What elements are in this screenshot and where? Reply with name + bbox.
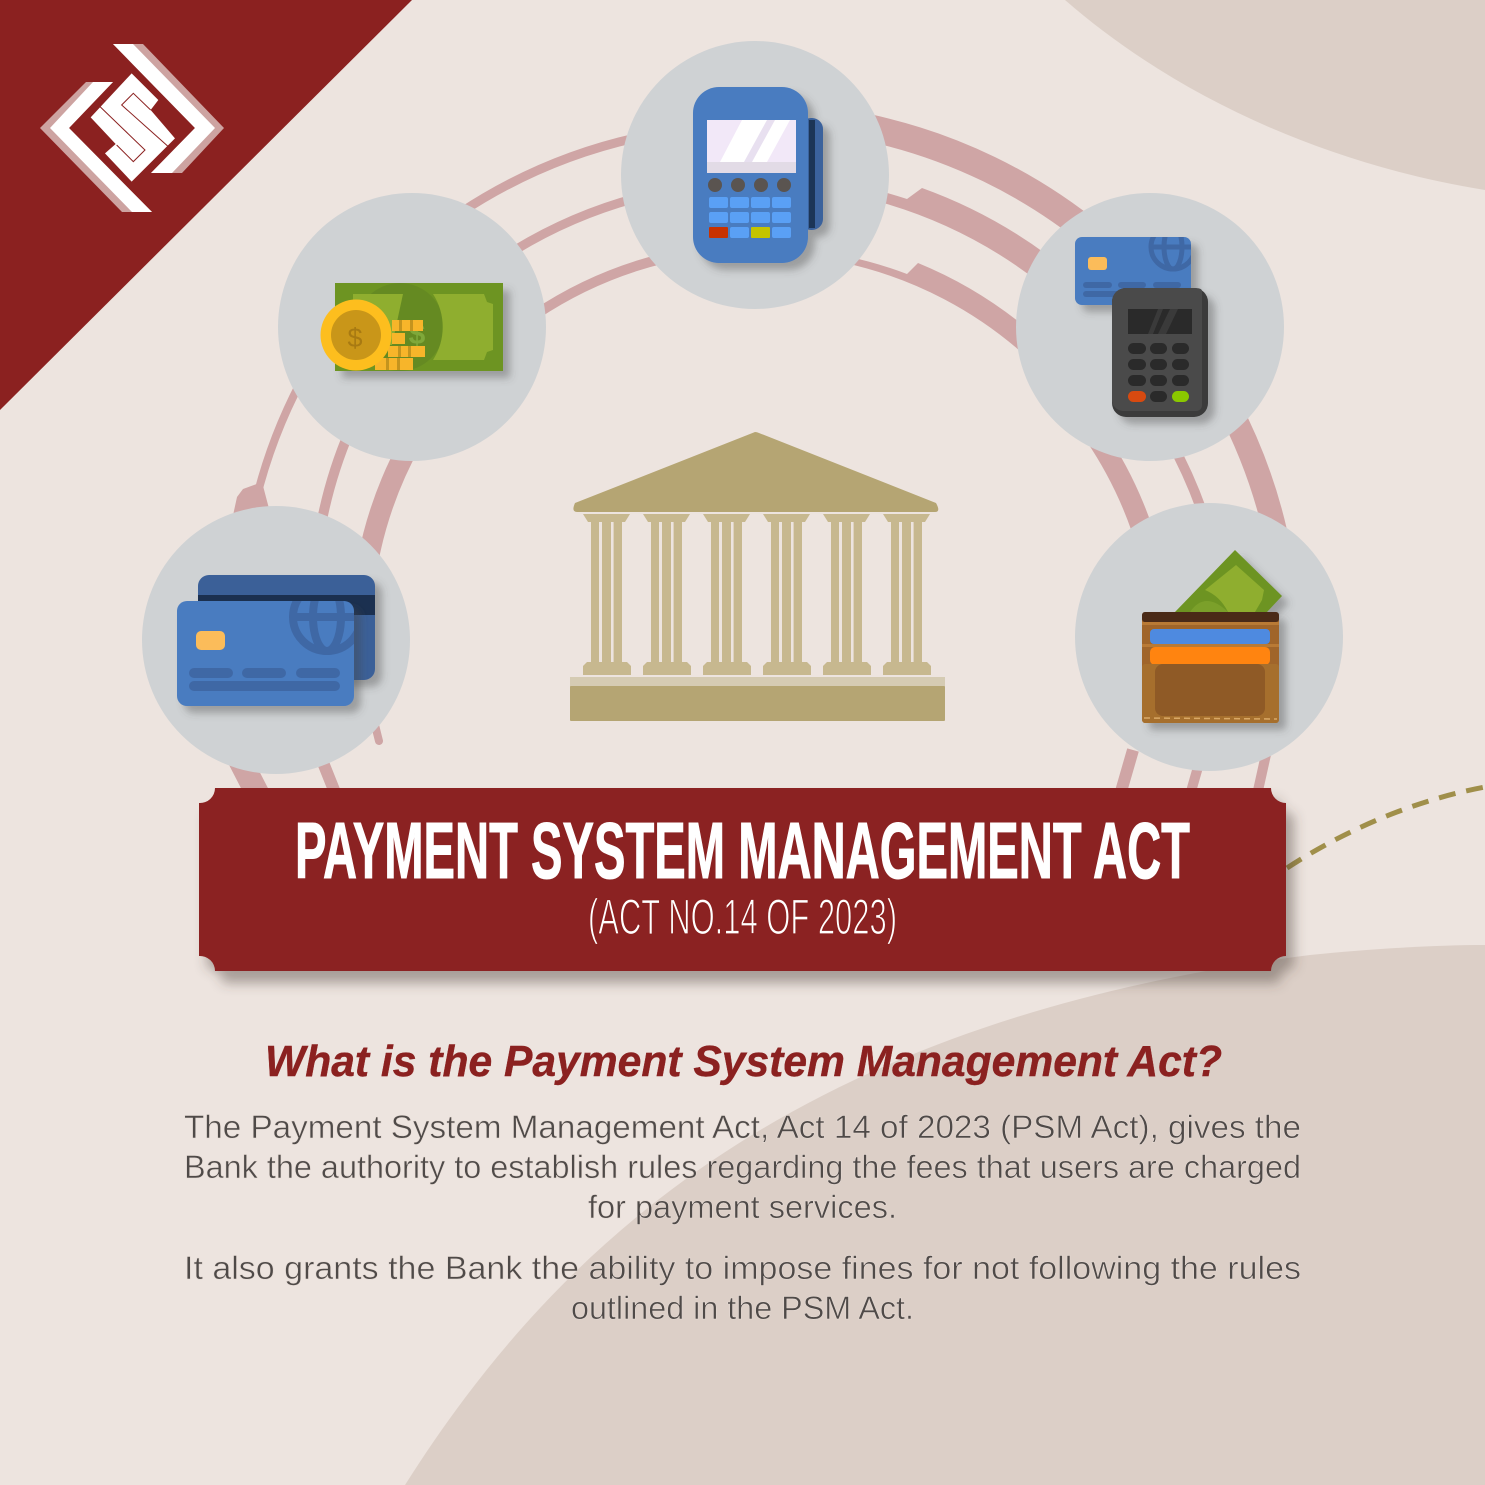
- ring arcs: [232, 128, 1280, 795]
- body paragraph one: The Payment System Management Act, Act 14 of 2023 (PSM Act), gives the: [184, 1109, 1301, 1145]
- background shape: top right: [1065, 0, 1485, 190]
- circle: top: [621, 41, 889, 309]
- circle: upper left: [278, 193, 546, 461]
- body paragraph one: for payment services.: [588, 1189, 897, 1225]
- icon: credit cards: [177, 575, 375, 706]
- circle: lower left: [142, 506, 410, 774]
- icon: card and card reader: [1075, 225, 1208, 417]
- icon: cash and coins: [320, 283, 503, 371]
- columns: [583, 514, 931, 675]
- circle: lower right: [1075, 503, 1343, 771]
- icon: cash and coins: $: [409, 318, 426, 351]
- bank building: [570, 432, 945, 721]
- body paragraph one: [184, 1109, 1301, 1225]
- title banner: [199, 788, 1286, 971]
- corner triangle: [0, 0, 412, 410]
- background shape: bottom right: [405, 945, 1485, 1485]
- icon: wallet with banknote: [1142, 550, 1282, 723]
- circle: upper right: [1016, 193, 1284, 461]
- banner subtitle: (ACT NO.14 OF 2023): [588, 889, 897, 945]
- body paragraph one: Bank the authority to establish rules regarding the fees that users are charged: [184, 1149, 1301, 1185]
- roof: [573, 432, 938, 512]
- body paragraph two: [184, 1250, 1301, 1326]
- dashed connector: [1287, 787, 1485, 868]
- body paragraph two: outlined in the PSM Act.: [571, 1290, 914, 1326]
- heading: What is the Payment System Management Act?: [265, 1037, 1222, 1086]
- logo: [40, 44, 224, 212]
- icon: POS terminal: [693, 87, 823, 263]
- body paragraph two: It also grants the Bank the ability to impose fines for not following the rules: [184, 1250, 1301, 1286]
- plinth: [570, 677, 945, 687]
- icon: cash and coins: $: [347, 323, 363, 353]
